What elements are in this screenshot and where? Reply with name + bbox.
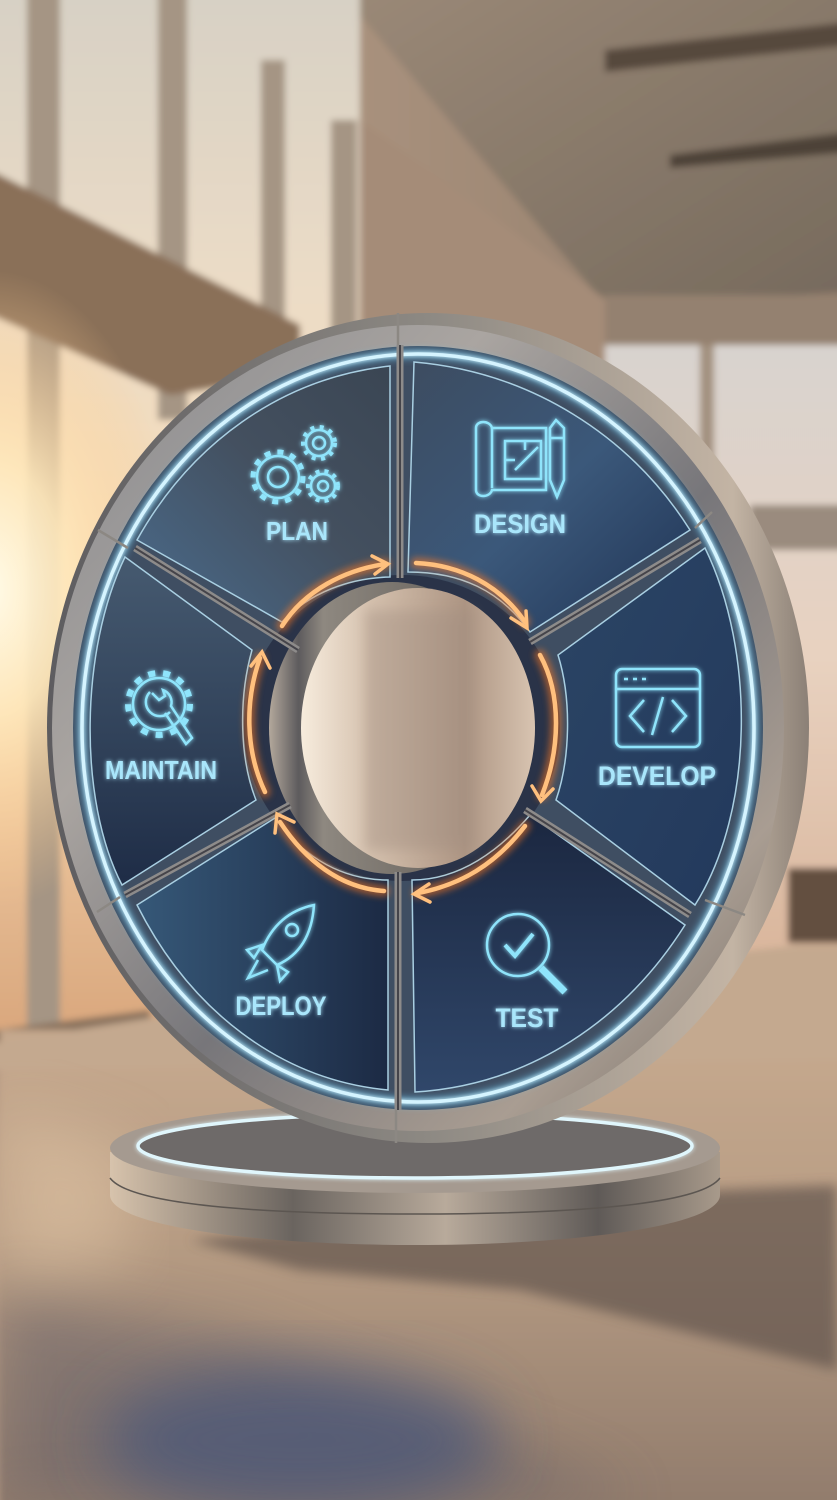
arrow: plan to design	[282, 556, 388, 626]
icon: gears	[253, 427, 338, 502]
icon: code window	[616, 669, 700, 747]
panel: design segment	[408, 362, 690, 632]
arrow: design to develop	[416, 563, 527, 628]
label: develop: DEVELOP	[598, 761, 716, 791]
label: design: DESIGN	[474, 509, 566, 539]
arrows: orange cycle	[249, 556, 556, 902]
base pedestal	[110, 1103, 720, 1245]
label: deploy: DEPLOY	[236, 991, 326, 1021]
arrow: maintain to plan	[249, 652, 270, 792]
label: plan: PLAN	[266, 516, 328, 546]
panel: maintain segment	[90, 557, 256, 885]
ring: outer metal frame	[47, 313, 809, 1143]
label: test: TEST	[496, 1003, 559, 1033]
arrow: develop to test	[532, 655, 556, 801]
icon: rocket	[247, 905, 314, 981]
icon: magnifier with check	[487, 914, 565, 992]
panel: develop segment	[556, 548, 741, 905]
panel: plan segment	[137, 366, 390, 622]
arrow: deploy to maintain	[275, 814, 384, 891]
icon: gear with wrench	[128, 673, 192, 744]
segment dividers	[125, 345, 700, 1110]
panel: test segment	[412, 815, 685, 1092]
hole in centre	[244, 575, 560, 881]
label: maintain: MAINTAIN	[105, 755, 217, 785]
icon: blueprint and pencil	[476, 420, 564, 497]
arrow: test to deploy	[414, 826, 525, 902]
panel: deploy segment	[137, 818, 388, 1090]
